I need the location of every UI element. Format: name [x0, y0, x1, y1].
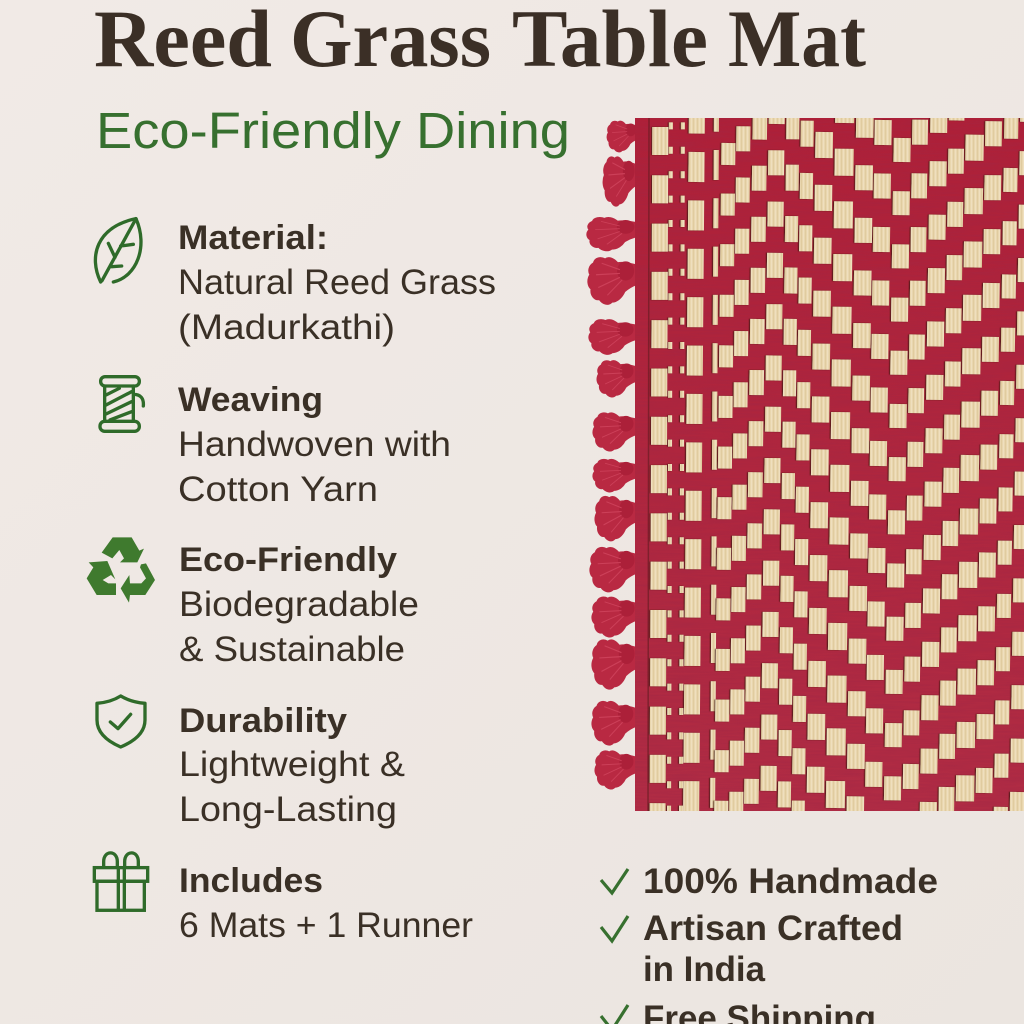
- text: eco-friendly: & Sustainable: [179, 630, 405, 669]
- text: includes: Includes: [179, 862, 323, 900]
- feature: durability: [97, 696, 405, 829]
- check: artisan crafted: [601, 909, 903, 989]
- text: weaving: [178, 381, 451, 509]
- reed columns: chevron field: [721, 66, 1024, 830]
- icon: leaf: [95, 219, 141, 282]
- feature: weaving: [100, 377, 451, 509]
- checklist: [601, 862, 938, 1024]
- text: weaving: Weaving: [178, 381, 323, 419]
- text: durability: Durability: [179, 702, 347, 740]
- icon: thread spool: [100, 377, 143, 431]
- text: material: Natural Reed Grass: [178, 263, 496, 302]
- panel: woven mat photo: [587, 66, 1024, 830]
- text: eco-friendly: Eco-Friendly: [179, 541, 397, 579]
- check: artisan crafted: Artisan Crafted: [643, 909, 903, 948]
- icon: gift: [94, 853, 148, 910]
- text: weaving: Cotton Yarn: [178, 470, 378, 509]
- text: weaving: Handwoven with: [178, 425, 451, 464]
- text: material: Material:: [178, 219, 328, 257]
- reed columns: left border: [658, 79, 716, 830]
- icon: recycle: [87, 537, 155, 603]
- feature: eco-friendly: [87, 537, 419, 669]
- text: includes: [179, 862, 473, 945]
- text: durability: [179, 702, 405, 829]
- text: eco-friendly: [179, 541, 419, 669]
- text: includes: 6 Mats + 1 Runner: [179, 906, 473, 945]
- text: material: [178, 219, 496, 347]
- title: [94, 0, 866, 84]
- check: artisan crafted: in India: [643, 950, 766, 989]
- mat weave: [635, 66, 1024, 830]
- text: durability: Long-Lasting: [179, 790, 397, 829]
- text: durability: Lightweight &: [179, 745, 405, 784]
- text: eco-friendly: Biodegradable: [179, 585, 419, 624]
- icon: shield: [97, 696, 145, 747]
- subtitle: Eco-Friendly Dining: [96, 102, 570, 159]
- text: material: (Madurkathi): [178, 308, 395, 347]
- tassels: [587, 121, 639, 789]
- feature: material: [95, 219, 496, 347]
- feature: includes: [94, 853, 473, 945]
- check: handmade: 100% Handmade: [643, 862, 938, 901]
